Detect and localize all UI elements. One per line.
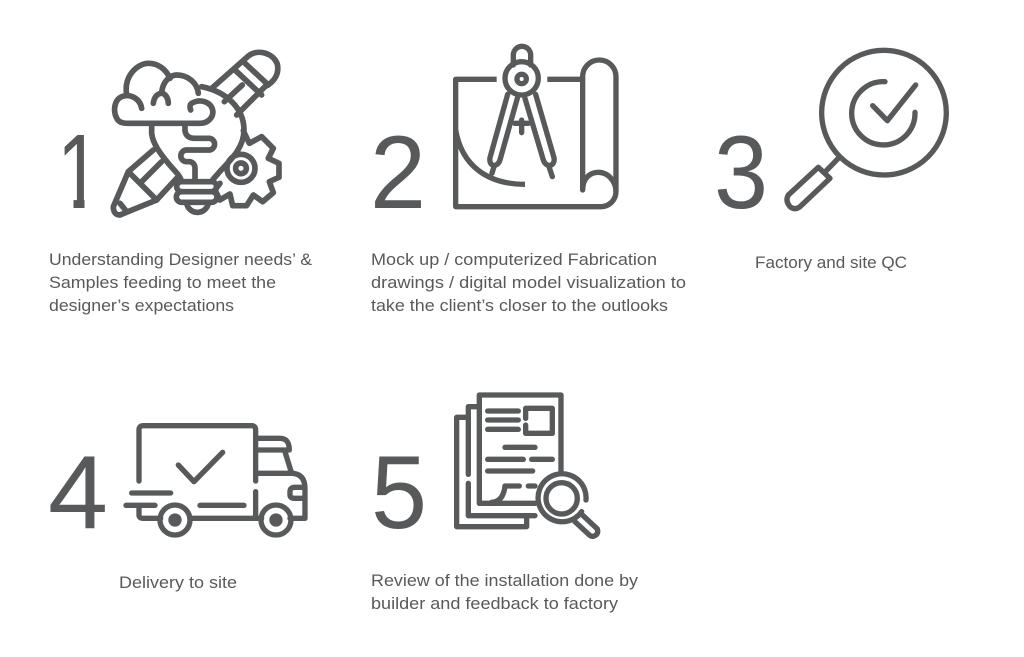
panel: step 3 — [714, 50, 946, 272]
text: step 5 description: builder and feedback to factory — [371, 594, 619, 613]
icon: lightbulb, cloud, pencil and gear — [113, 52, 279, 215]
text: step 5 description: Review of the installation done by — [371, 571, 639, 590]
text: step 2 description: take the client’s closer to the outlooks — [371, 296, 668, 315]
number 2: 2 — [370, 115, 426, 231]
text: step 5 description — [371, 571, 639, 613]
panel: step 1 — [49, 52, 313, 315]
text: step 2 description: Mock up / computerized Fabrication — [371, 250, 657, 269]
text: step 1 description — [49, 250, 313, 315]
text: step 1 description: designer’s expectations — [49, 296, 234, 315]
number 4: 4 — [48, 435, 108, 551]
panel: step 2 — [370, 46, 686, 315]
text: step 1 description: Understanding Designer needs’ & — [49, 250, 313, 269]
panel: step 5 — [371, 395, 639, 613]
number 1: 1 — [57, 113, 101, 231]
panel: step 4 — [48, 426, 305, 592]
icon: documents with magnifier — [457, 395, 598, 536]
text: step 4 description: Delivery to site — [119, 573, 237, 592]
icon: delivery truck — [126, 426, 305, 535]
text: step 2 description — [371, 250, 686, 315]
text: step 3 description: Factory and site QC — [755, 253, 907, 272]
icon: magnifier with check mark — [787, 50, 946, 209]
number 3: 3 — [714, 115, 768, 231]
icon: blueprint and compass — [456, 46, 616, 207]
text: step 2 description: drawings / digital model visualization to — [371, 273, 686, 292]
number 5: 5 — [371, 435, 427, 551]
text: step 1 description: Samples feeding to meet the — [49, 273, 276, 292]
